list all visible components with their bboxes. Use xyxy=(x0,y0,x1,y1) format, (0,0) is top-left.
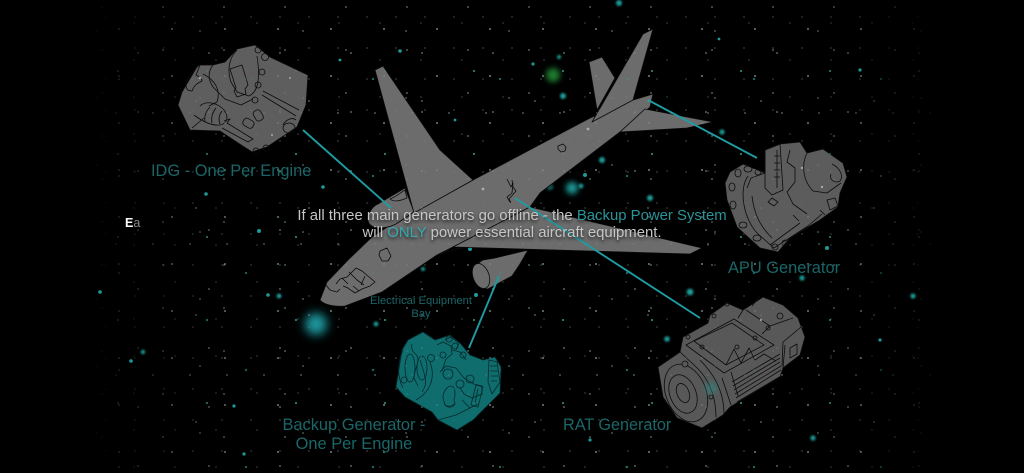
label: APU generator: APU Generator xyxy=(728,259,840,277)
label: electrical equipment bay: Bay xyxy=(411,308,431,320)
label: IDG: IDG - One Per Engine xyxy=(151,162,311,180)
APU generator machine xyxy=(725,142,847,252)
RAT generator machine xyxy=(656,296,805,428)
soft light on RAT generator xyxy=(705,382,717,394)
connector lines xyxy=(303,100,757,348)
cutaway details xyxy=(326,144,566,293)
vertical tail xyxy=(592,29,653,122)
main message text xyxy=(297,208,727,243)
fuselage xyxy=(320,94,653,306)
label: backup generator: One Per Engine xyxy=(296,435,412,453)
label: backup generator xyxy=(282,416,426,453)
bright glowing stars xyxy=(98,0,916,456)
label: electrical equipment bay xyxy=(370,295,472,320)
IDG machine xyxy=(178,45,308,154)
airplane xyxy=(320,29,713,306)
label: electrical equipment bay: Electrical Equipment xyxy=(370,295,472,307)
right engine xyxy=(474,250,528,289)
main message text: will ONLY power essential aircraft equipment. xyxy=(362,225,662,241)
main message text: If all three main generators go offline - the Backup Power System xyxy=(297,208,727,224)
upper wing xyxy=(375,66,473,213)
lower stabilizer xyxy=(620,109,713,132)
star overlay on top of artwork xyxy=(171,6,874,468)
backup generator machine xyxy=(396,332,501,430)
upper stabilizer fin xyxy=(589,57,615,110)
left engine xyxy=(368,188,414,228)
truncated left text: Ea xyxy=(125,216,140,230)
label: backup generator: Backup Generator - xyxy=(282,416,426,434)
label: RAT generator: RAT Generator xyxy=(563,416,671,434)
lower wing xyxy=(453,207,702,254)
